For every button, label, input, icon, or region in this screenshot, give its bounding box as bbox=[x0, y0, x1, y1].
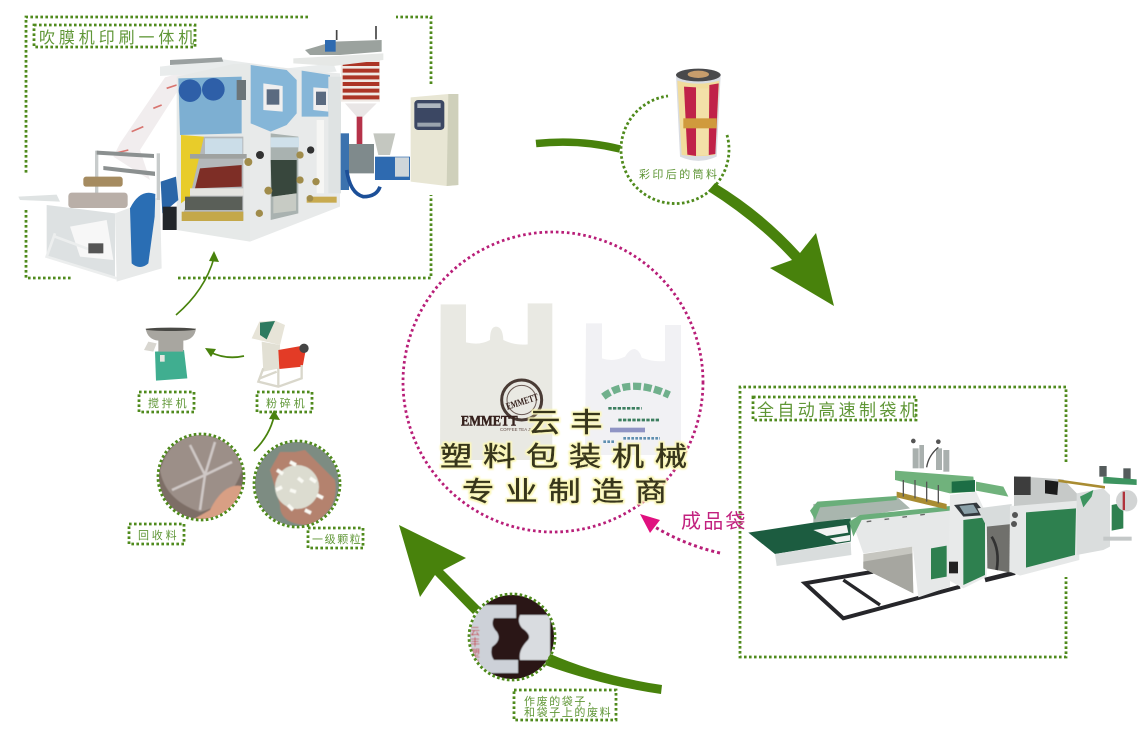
illustration: white vest bags bbox=[440, 303, 681, 460]
label: crusher: 粉碎机 bbox=[266, 396, 307, 410]
heading: automatic bag making machine: 全自动高速制袋机 bbox=[757, 401, 920, 420]
label: first grade granules bbox=[308, 528, 363, 548]
label: first grade granules: 一级颗粒 bbox=[312, 532, 362, 546]
arrow: crusher to mixer bbox=[205, 348, 244, 357]
machine illustration: film blowing and printing line bbox=[18, 26, 458, 282]
arrow: waste material back to recycling bbox=[399, 525, 662, 694]
label: recycled material bbox=[129, 524, 184, 544]
panel: blown film printing machine bbox=[18, 17, 458, 282]
title: company and tagline: 专业制造商 bbox=[462, 477, 678, 507]
label: scrap bags and offcuts: 作废的袋子， bbox=[524, 694, 600, 708]
arrow: machine to printed roll bbox=[536, 142, 620, 149]
arrow: mixer to film machine bbox=[176, 251, 219, 315]
arrow: granules to crusher bbox=[254, 410, 280, 451]
label: scrap bags and offcuts bbox=[514, 690, 616, 720]
label: mixer bbox=[139, 392, 194, 412]
arrow: finished bags output bbox=[640, 514, 720, 553]
machine illustration: bag making line bbox=[748, 439, 1137, 618]
illustration: white vest bags: EMMETT bbox=[461, 414, 518, 430]
label: recycled material: 回收料 bbox=[138, 528, 179, 542]
icon: crusher bbox=[252, 321, 309, 387]
photo: scrap bags: 云丰塑料 bbox=[468, 626, 480, 670]
title: company and tagline bbox=[440, 408, 698, 507]
title: company and tagline: 塑料包装机械 bbox=[440, 442, 698, 472]
illustration: white vest bags: EMMETT bbox=[505, 392, 540, 413]
callout: printed film roll bbox=[621, 69, 729, 204]
photo: first grade granules bbox=[252, 440, 342, 528]
photo: recycled material bbox=[155, 432, 247, 524]
panel: automatic bag making machine bbox=[740, 387, 1137, 657]
label: mixer: 搅拌机 bbox=[148, 396, 189, 410]
label: scrap bags and offcuts: 和袋子上的废料 bbox=[524, 705, 612, 719]
label: crusher bbox=[257, 392, 312, 412]
photo: scrap bags bbox=[468, 590, 558, 680]
icon: mixer bbox=[144, 328, 196, 381]
caption: printed roll: 彩印后的筒料 bbox=[639, 167, 719, 181]
label: finished bags: 成品袋 bbox=[681, 510, 748, 533]
illustration: white vest bags: COFFEE TEA JUICE bbox=[500, 427, 541, 432]
panel: finished bags centre bbox=[403, 232, 703, 532]
arrow: printed roll to bag machine bbox=[708, 183, 834, 306]
icon: printed film roll bbox=[676, 69, 721, 161]
heading: blown film printing machine: 吹膜机印刷一体机 bbox=[39, 29, 198, 47]
title: company and tagline: 云丰 bbox=[528, 408, 612, 438]
